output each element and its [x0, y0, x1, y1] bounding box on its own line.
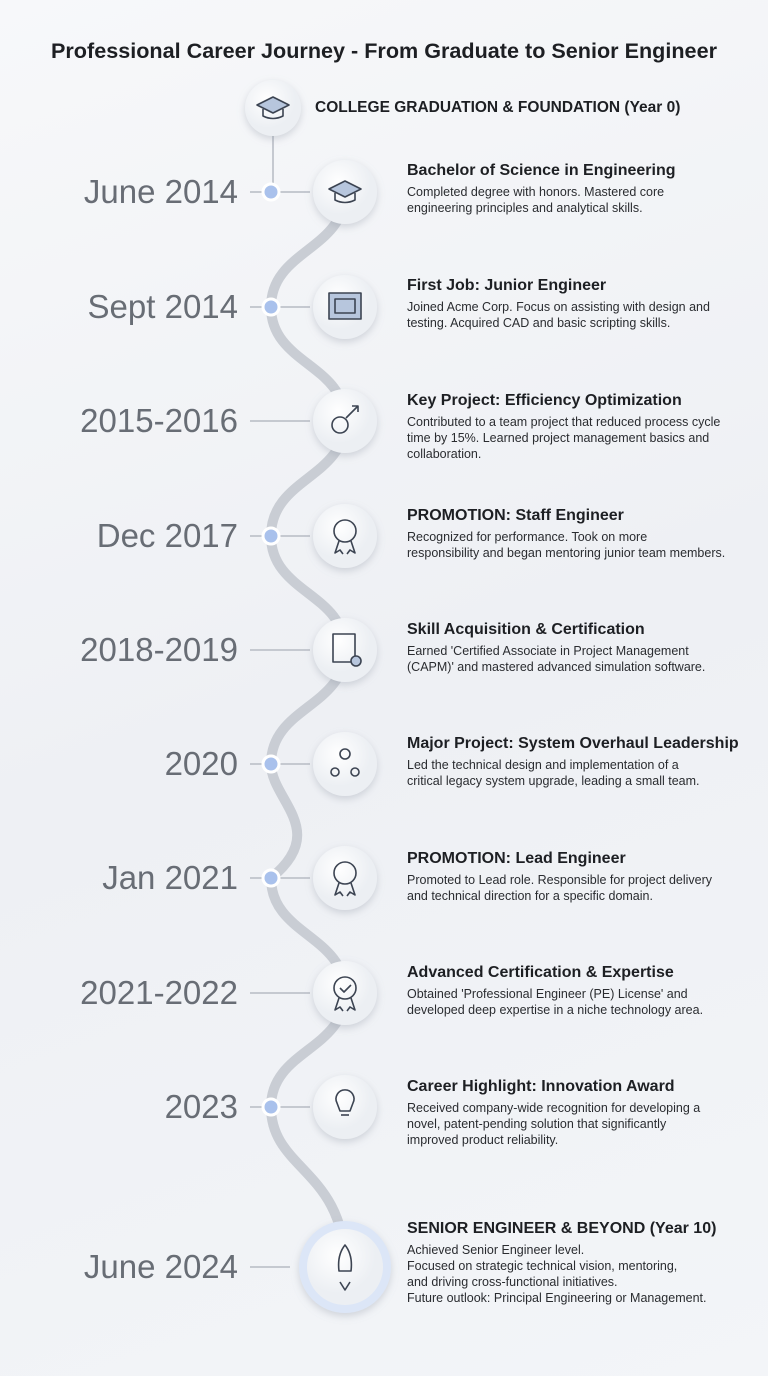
text: 2015-2016	[80, 402, 238, 439]
item: senior engineer: SENIOR ENGINEER & BEYOND (Year 10)	[407, 1220, 716, 1237]
item: certification	[407, 621, 705, 674]
item: key project	[407, 392, 720, 461]
item: first job: First Job: Junior Engineer	[407, 277, 606, 294]
item: senior engineer: Future outlook: Principal Engineering or Management.	[407, 1291, 706, 1305]
item: bachelor	[407, 162, 676, 215]
icons	[257, 97, 361, 1290]
item: senior engineer: and driving cross-functional initiatives.	[407, 1275, 618, 1289]
item: innovation award: novel, patent-pending solution that significantly	[407, 1117, 666, 1131]
item: senior engineer	[407, 1220, 716, 1305]
heading: college graduation: COLLEGE GRADUATION & FOUNDATION (Year 0)	[315, 99, 680, 116]
text: Dec 2017	[97, 517, 238, 554]
title: Professional Career Journey - From Graduate to Senior Engineer	[51, 38, 717, 63]
item: certification: (CAPM)' and mastered advanced simulation software.	[407, 660, 705, 674]
text: 2020	[165, 745, 238, 782]
item: major project	[407, 735, 739, 788]
item: senior engineer: Achieved Senior Engineer level.	[407, 1243, 584, 1257]
item: lead engineer	[407, 850, 712, 903]
item: first job: Joined Acme Corp. Focus on assisting with design and	[407, 300, 710, 314]
item: staff engineer: responsibility and began mentoring junior team members.	[407, 546, 725, 560]
item: bachelor: Bachelor of Science in Engineering	[407, 162, 676, 179]
text: 2021-2022	[80, 974, 238, 1011]
dates: June 2014	[84, 173, 238, 210]
item: lead engineer: Promoted to Lead role. Responsible for project delivery	[407, 873, 712, 887]
item: advanced certification: Obtained 'Professional Engineer (PE) License' and	[407, 987, 688, 1001]
item: key project: time by 15%. Learned project management basics and	[407, 431, 709, 445]
item: first job: testing. Acquired CAD and basic scripting skills.	[407, 316, 670, 330]
text: 2023	[165, 1088, 238, 1125]
node circles	[245, 80, 377, 1139]
item: certification: Earned 'Certified Associate in Project Management	[407, 644, 689, 658]
item: innovation award	[407, 1078, 700, 1147]
text: June 2024	[84, 1248, 238, 1285]
item: innovation award: Received company-wide recognition for developing a	[407, 1101, 700, 1115]
item: lead engineer: and technical direction for a specific domain.	[407, 889, 653, 903]
item: first job	[407, 277, 710, 330]
item: lead engineer: PROMOTION: Lead Engineer	[407, 850, 626, 867]
text: 2018-2019	[80, 631, 238, 668]
item: innovation award: improved product reliability.	[407, 1133, 558, 1147]
item: advanced certification: developed deep expertise in a niche technology area.	[407, 1003, 703, 1017]
item: staff engineer	[407, 507, 725, 560]
text: Jan 2021	[102, 859, 238, 896]
text: Sept 2014	[88, 288, 238, 325]
item: key project: Contributed to a team project that reduced process cycle	[407, 415, 720, 429]
item: staff engineer: Recognized for performance. Took on more	[407, 530, 647, 544]
item: senior engineer: Focused on strategic technical vision, mentoring,	[407, 1259, 677, 1273]
item: key project: collaboration.	[407, 447, 481, 461]
item: major project: critical legacy system upgrade, leading a small team.	[407, 774, 700, 788]
item: advanced certification	[407, 964, 703, 1017]
item: staff engineer: PROMOTION: Staff Engineer	[407, 507, 624, 524]
item: key project: Key Project: Efficiency Optimization	[407, 392, 682, 409]
item: major project: Led the technical design and implementation of a	[407, 758, 679, 772]
item: bachelor: Completed degree with honors. Mastered core	[407, 185, 664, 199]
item: bachelor: engineering principles and analytical skills.	[407, 201, 643, 215]
item: advanced certification: Advanced Certification & Expertise	[407, 964, 674, 981]
item: major project: Major Project: System Overhaul Leadership	[407, 735, 739, 752]
item: certification: Skill Acquisition & Certification	[407, 621, 645, 638]
item: innovation award: Career Highlight: Innovation Award	[407, 1078, 675, 1095]
